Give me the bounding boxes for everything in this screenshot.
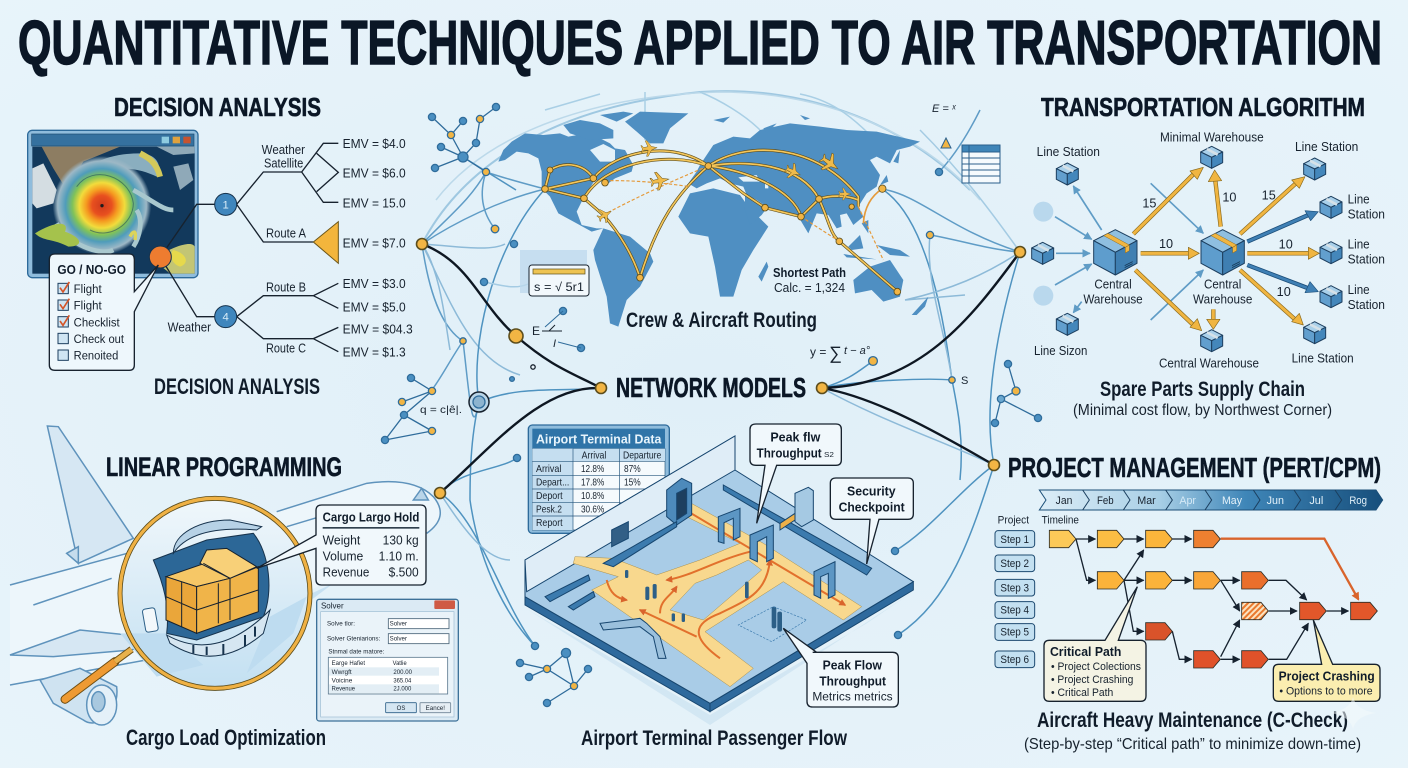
cluster: left middle [381,374,436,444]
callout: peak flow throughput metrics: Peak Flow [823,658,882,672]
formula box [520,250,589,296]
continents [498,112,928,327]
callout: project crashing [1273,620,1380,701]
terminal data table: 15% [624,478,641,489]
solver dialog: Solver [321,602,344,611]
tree labels: EMV = $6.0 [343,166,406,181]
tree branches [160,143,338,352]
solver dialog: 200.00 [393,670,413,676]
solver dialog: Eance! [426,706,445,712]
cargo callout: Volume [323,548,363,563]
warehouse labels: Central [1204,277,1241,292]
warehouse labels: Central [1094,277,1132,292]
solver dialog: 365.04 [393,678,412,684]
network nodes: small clusters [381,103,1042,707]
terminal data table: Deport [536,491,563,502]
timeline chevrons [1039,490,1383,510]
world map [498,112,928,327]
decision nodes: 4 [223,312,229,324]
formulas: E = ˣ [932,103,957,115]
panel: decision analysis [28,130,413,370]
tree labels: EMV = $1.3 [343,345,406,360]
terminal data table: Departure [623,450,661,461]
formulas: E [532,324,540,338]
tree labels: Satellite [264,155,303,170]
flow quantities: 10 [1279,238,1293,252]
step buttons [995,531,1035,668]
callout: peak flow throughput upper: Peak flw [770,430,820,444]
solver dialog: Earge Hafiet [332,661,365,667]
warehouse labels: Line [1348,192,1370,207]
warehouse labels: Line Station [1292,351,1354,366]
cargo callout: 130 kg [383,533,419,548]
cargo callout: Weight [323,533,361,548]
go / no-go checklist: Check out [74,332,125,346]
cargo callout: 1.10 m. [379,548,419,563]
aircraft illustration [10,426,440,725]
callout: critical path: • Project Crashing [1051,674,1133,686]
decision nodes [149,193,338,328]
terminal data table: Report [536,518,563,529]
step buttons: Step 5 [1000,627,1029,639]
warehouse labels: Warehouse [1083,292,1143,307]
callout: critical path: Critical Path [1050,645,1121,659]
solver dialog: Wwrgft [332,670,352,676]
callout: project crashing: • Options to to more [1279,686,1373,698]
heading: decision analysis: DECISION ANALYSIS [114,92,321,122]
heading: network models: NETWORK MODELS [616,372,806,403]
terminal data table: Pesk.2 [536,504,562,515]
solver dialog [317,599,458,721]
cargo callout: $.500 [389,564,419,579]
tree labels: Route C [266,341,306,356]
timeline chevrons: Apr [1179,495,1196,507]
tree labels [168,136,413,360]
timeline chevrons: May [1222,495,1242,507]
callout: peak flow throughput upper [750,424,841,523]
callout: peak flow throughput metrics: Metrics metrics [812,689,893,703]
step buttons: Step 2 [1000,558,1029,570]
cluster: below terminal [516,642,592,707]
network threads: background web [422,91,1020,646]
tree labels: Weather [262,142,305,157]
warehouse labels: Line [1348,237,1370,252]
flow quantities: 10 [1159,237,1173,251]
sparkle mark [1330,697,1376,729]
row labels: Timeline [1042,514,1079,526]
step buttons: Step 1 [1000,534,1029,546]
solver dialog: Solver Gteniarions: [327,637,381,643]
terminal data table: Airport Terminal Data [536,432,662,446]
callout: security checkpoint: Security [847,484,896,498]
label: shortest path: Shortest Path [773,265,846,280]
tree labels: Route B [266,279,306,294]
terminal data table: 30.6% [581,504,605,515]
yellow and dark flow arrows [1133,167,1319,331]
warehouse labels [1034,129,1385,371]
terminal data table: 17.8% [581,478,605,489]
warehouse labels: Station [1348,297,1385,312]
heading: linear programming: LINEAR PROGRAMMING [106,452,342,482]
tree labels: EMV = $3.0 [343,276,406,291]
step buttons: Step 3 [1000,582,1029,594]
warehouse labels: Station [1348,252,1385,267]
passenger flow arrows [607,507,845,658]
flow quantities [1142,189,1293,299]
terminal data table: Depart... [536,478,569,489]
flow quantities: 10 [1277,285,1291,299]
timeline chevrons: Rog [1349,495,1367,507]
callout: critical path: • Project Colections [1051,661,1141,673]
subtitle: spare parts supply chain: (Minimal cost flow, by Northwest Corner) [1073,402,1332,419]
cluster: right middle [991,360,1042,427]
heading: decision analysis subtitle: DECISION ANALYSIS [154,374,320,399]
formulas: y = [810,345,826,359]
formulas [420,103,968,416]
solver dialog: Revenue [332,687,356,693]
warehouse labels: Station [1348,207,1385,222]
solver dialog: Solver [390,637,407,643]
solver dialog: Vatlie [393,661,407,667]
formulas: I [553,338,556,350]
solver dialog: OS [397,706,405,712]
dependency arrows [1076,539,1348,659]
flow quantities: 10 [1222,191,1236,205]
panel: transportation algorithm [1032,129,1385,371]
solver dialog: 2J.000 [393,687,412,693]
passenger figures [625,570,807,642]
formulas: t − a° [844,345,871,357]
caption: cargo load optimization: Cargo Load Optimization [126,725,326,750]
go / no-go checklist [49,254,158,370]
cluster: upper left [428,103,500,176]
panel: linear programming [10,426,458,725]
cargo callout: Revenue [323,564,369,579]
solver dialog: Solve tlor: [327,622,355,628]
callout: security checkpoint [830,478,913,564]
passenger walkways [573,502,862,687]
loose nodes [460,168,955,639]
lakes and seas [590,144,768,188]
callout: peak flow throughput metrics [783,628,898,707]
caption: aircraft heavy maintenance: Aircraft Heavy Maintenance (C-Check) [1037,709,1348,732]
magnifier lens with cargo [120,498,310,688]
warehouse labels: Line Station [1037,144,1100,159]
terminal data table: Arrival [582,450,606,461]
panel: airport terminal [525,424,913,725]
warehouse boxes [1032,146,1342,352]
terminal data table: 10.8% [581,491,605,502]
subtitle: spare parts supply chain [1073,378,1332,419]
terminal floor [525,436,913,725]
go / no-go checklist: Flight [74,299,102,313]
timeline chevrons: Jul [1309,495,1323,507]
timeline chevrons: Jun [1267,495,1284,507]
callout: peak flow throughput metrics: Throughput [819,674,887,688]
tree labels: EMV = $7.0 [343,236,406,251]
satellite window [28,130,198,278]
flow quantities: 15 [1142,196,1156,210]
step buttons: Step 4 [1000,605,1029,617]
hub nodes [416,238,1026,498]
flight routes [545,150,897,292]
solver dialog: Stnmal date matore: [328,650,385,656]
formula box: s = √ 5r1 [534,280,584,294]
decision nodes: 1 [223,199,229,211]
caption: aircraft heavy maintenance [1024,709,1361,753]
warehouse labels: Warehouse [1193,292,1252,307]
timeline chevrons: Feb [1097,495,1114,507]
callout: security checkpoint: Checkpoint [839,500,905,514]
go / no-go checklist: GO / NO-GO [57,262,126,277]
subtitle: spare parts supply chain: Spare Parts Supply Chain [1100,378,1305,401]
label: shortest path: Calc. = 1,324 [774,280,845,295]
heading: crew and aircraft routing: Crew & Aircraft Routing [626,309,817,332]
callout: peak flow throughput upper: S2 [824,450,834,459]
label: shortest path [773,265,846,295]
airplanes [595,140,851,225]
flow quantities: 15 [1262,189,1276,203]
cargo callout [257,505,426,585]
terminal data table: 12.8% [581,464,605,475]
timeline chevrons: Mar [1137,495,1156,507]
mini table [941,138,1000,183]
activity nodes [1049,530,1377,668]
terminal gates and equipment [545,478,872,658]
solver dialog: Voicine [332,678,353,684]
row labels: Project [998,514,1029,526]
connectors: black main curves [422,244,1020,493]
terminal data table: 87% [624,464,641,475]
tree labels: EMV = $5.0 [343,300,406,315]
callout: critical path [1044,587,1146,701]
row labels [998,514,1079,526]
callout: project crashing: Project Crashing [1279,670,1375,684]
route stops [542,163,901,295]
magnifier handle [65,649,132,699]
terminal data table: Arrival [536,464,561,475]
callout: peak flow throughput upper: Throughput [757,446,822,460]
tree labels: Route A [266,226,306,241]
caption: airport terminal passenger flow: Airport Terminal Passenger Flow [581,727,848,750]
panel: PERT chart [995,490,1383,701]
go / no-go checklist: Flight [74,282,102,296]
formulas: ∑ [829,343,842,363]
warehouse labels: Minimal Warehouse [1160,129,1264,144]
tree labels: EMV = $4.0 [343,136,406,151]
go / no-go checklist: Renoited [74,349,118,363]
timeline chevrons: Jan [1056,495,1072,507]
terminal data table [528,425,669,533]
tree labels: EMV = 15.0 [343,195,406,210]
warehouse labels: Line [1348,282,1370,297]
warehouse labels: Central Warehouse [1159,356,1259,371]
critical path line [1221,539,1358,599]
go / no-go checklist: Checklist [74,315,120,329]
formulas: q = c|ê|. [420,404,462,416]
step buttons: Step 6 [1000,654,1029,666]
caption: aircraft heavy maintenance: (Step-by-step “Critical path” to minimize down-time) [1024,736,1361,753]
tree labels: EMV = $04.3 [343,322,413,337]
cargo callout: Cargo Largo Hold [323,511,419,525]
solver dialog: Solver [390,622,407,628]
tree labels: Weather [168,320,211,335]
callout: critical path: • Critical Path [1051,687,1113,699]
warehouse labels: Line Sizon [1034,343,1087,358]
blue flow arrows [1055,183,1203,320]
warehouse labels: Line Station [1295,139,1358,154]
formulas: S [961,375,968,387]
